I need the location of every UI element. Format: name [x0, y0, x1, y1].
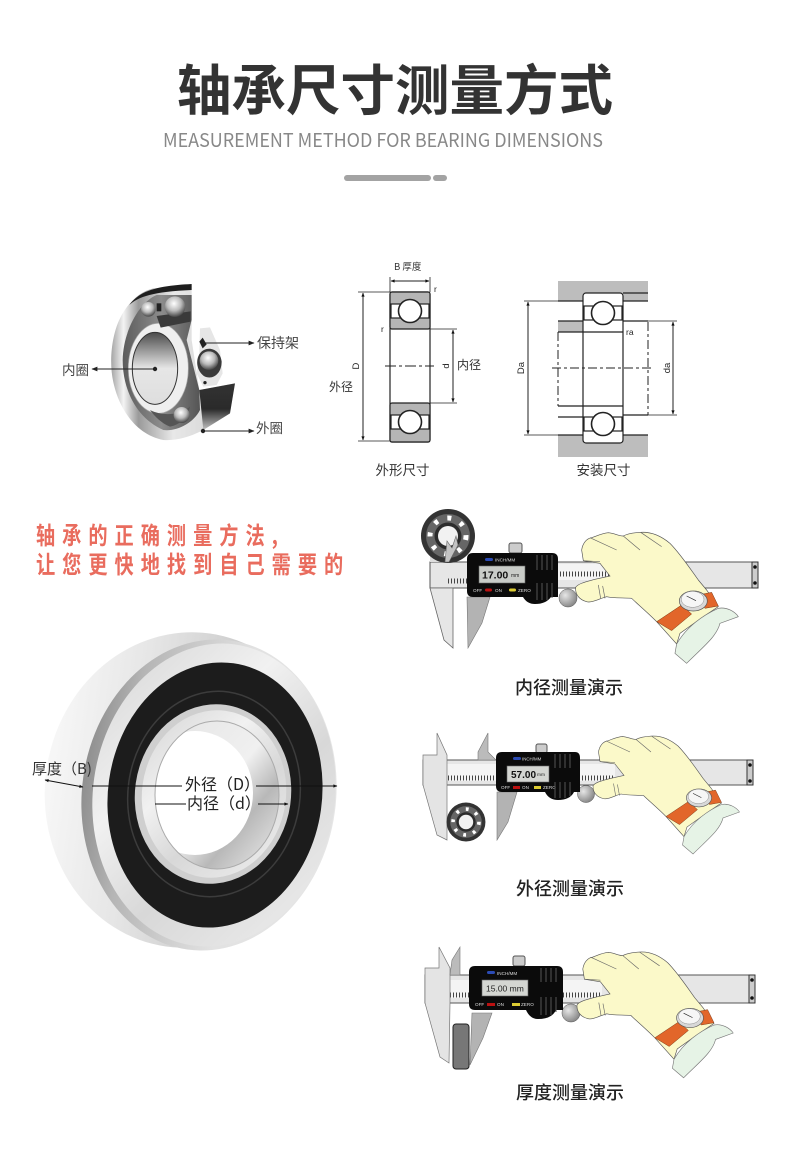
caption: 内径测量演示: [515, 674, 623, 700]
headline line 1: 轴承的正确测量方法,: [36, 517, 285, 552]
caliper: ZERO: [518, 588, 531, 593]
bearing photo: [45, 632, 336, 950]
label: cage: 保持架: [257, 333, 299, 353]
caption: 外径测量演示: [516, 875, 624, 901]
bearing between jaws: [447, 803, 485, 841]
caliper: 57.00: [511, 770, 536, 781]
subtitle: MEASUREMENT METHOD FOR BEARING DIMENSIONS: [163, 126, 603, 153]
gloved hand with watch: [577, 952, 733, 1078]
caliper: ON: [497, 1002, 504, 1007]
caliper: ON: [495, 588, 502, 593]
label: inner ring: [62, 359, 157, 379]
label: thickness B: 厚度（B): [32, 758, 92, 779]
caliper: 17.00: [482, 570, 508, 582]
caliper: OFF: [501, 785, 510, 790]
dimension d: [430, 329, 481, 403]
headline line 2: 让您更快地找到自己需要的: [36, 546, 350, 581]
label: inner ring: 内圈: [62, 359, 89, 379]
caliper demo: outer diameter: [423, 733, 753, 901]
label: outer ring: [201, 417, 283, 437]
label: outer ring: 外圈: [256, 417, 283, 437]
radius label: ra: [626, 327, 634, 337]
caliper demo: inner diameter: [421, 509, 758, 700]
radius labels: r: [434, 284, 437, 294]
caliper: [425, 947, 755, 1069]
bearing cross-section: [390, 292, 430, 442]
caliper: ZERO: [521, 1002, 534, 1007]
caliper: 15.00 mm: [486, 984, 524, 994]
radius labels: [381, 284, 437, 334]
dimension B: [390, 259, 430, 292]
caliper: INCH/MM: [522, 756, 542, 762]
caliper: mm: [511, 573, 519, 579]
dimension Da: [516, 301, 558, 435]
dimension D: 外径: [329, 378, 353, 395]
dimension D: D: [351, 362, 362, 369]
title accent bar: [344, 175, 447, 181]
caliper: mm: [537, 773, 545, 778]
cutaway bearing diagram: [62, 284, 299, 440]
dimension da: [648, 321, 677, 415]
housing and shaft: [558, 281, 648, 457]
gloved hand with watch: [593, 736, 740, 854]
dimension B: B 厚度: [394, 259, 422, 273]
caliper: OFF: [475, 1002, 484, 1007]
label: cage: [205, 333, 299, 353]
dimension d: d: [441, 363, 452, 369]
caliper: INCH/MM: [497, 971, 517, 976]
dimension d: 内径: [457, 356, 481, 373]
caliper: [423, 733, 753, 840]
mounting dimensions drawing: [516, 281, 677, 479]
bearing cross-section: [583, 293, 623, 443]
caliper: ON: [522, 785, 529, 790]
caliper: OFF: [473, 588, 482, 593]
photo of sealed bearing with labels: [32, 632, 338, 950]
cutaway bearing body: [111, 284, 235, 440]
centre line: [385, 365, 434, 367]
caliper: [430, 543, 758, 648]
label: outer diameter D: 外径（D）: [185, 771, 260, 795]
red headline: [36, 517, 350, 581]
caption: 外形尺寸: [376, 459, 430, 479]
title: 轴承尺寸测量方式: [177, 47, 613, 126]
outline dimensions drawing: [329, 259, 481, 479]
dimension D: [329, 292, 390, 441]
caliper demo: thickness: [425, 947, 755, 1105]
radius labels: r: [381, 324, 384, 334]
centre lines: [552, 322, 653, 415]
caliper: ZERO: [543, 785, 556, 790]
bearing on jaws: [421, 509, 475, 563]
gloved hand with watch: [576, 532, 738, 663]
caliper: INCH/MM: [495, 558, 515, 562]
caption: 安装尺寸: [576, 459, 630, 479]
dimension da: da: [662, 362, 673, 373]
caption: 厚度测量演示: [516, 1079, 624, 1105]
dimension Da: Da: [516, 361, 527, 374]
label: inner diameter d: 内径（d）: [187, 790, 261, 814]
label: inner diameter d: [155, 790, 288, 814]
